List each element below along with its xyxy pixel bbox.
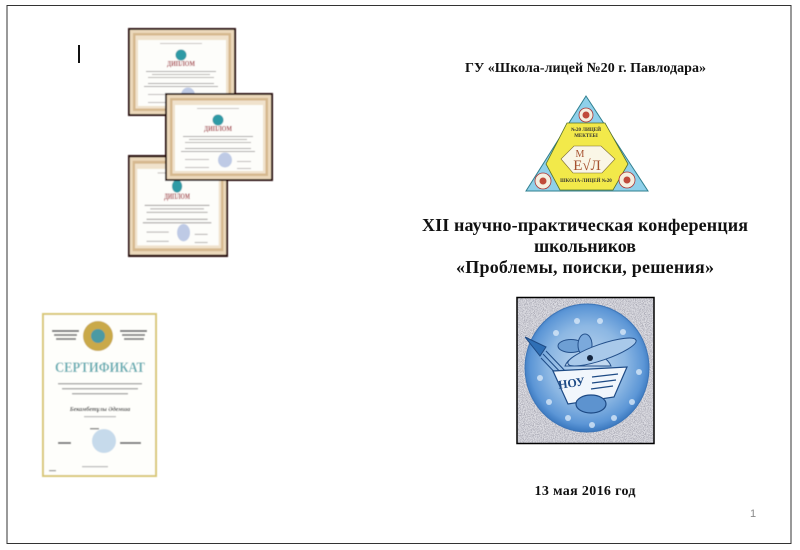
organisation heading: ГУ «Школа-лицей №20 г. Павлодара» <box>465 61 706 76</box>
school logo: МЕКТЕБІ <box>574 134 598 139</box>
certificate stamp <box>92 429 116 453</box>
open book: НОУ <box>557 374 586 392</box>
diploma: bottom <box>128 155 228 257</box>
school logo: №20 ЛИЦЕЙ <box>571 127 601 133</box>
diplomas group <box>128 28 273 257</box>
ink pot <box>576 395 606 413</box>
page number: 1 <box>750 508 756 520</box>
text cursor <box>78 45 80 63</box>
school logo: ШКОЛА-ЛИЦЕЙ №20 <box>560 178 612 184</box>
school logo: М <box>576 149 585 160</box>
school logo <box>526 96 648 191</box>
central hexagon <box>561 146 615 173</box>
conference badge <box>517 298 654 444</box>
conference title: «Проблемы, поиски, решения» <box>456 257 714 277</box>
conference date: 13 мая 2016 год <box>534 484 636 499</box>
conference title <box>422 215 748 277</box>
conference title: XII научно-практическая конференция <box>422 215 748 235</box>
diploma: top <box>128 28 236 116</box>
emblem <box>83 321 113 351</box>
hat <box>558 333 639 371</box>
conference title: школьников <box>534 236 636 256</box>
open book <box>553 367 627 404</box>
school logo: Е√Л <box>573 158 601 174</box>
ring of lights <box>537 318 642 428</box>
certificate <box>42 313 157 477</box>
diploma: middle <box>165 93 273 181</box>
certificate heading: СЕРТИФИКАТ <box>55 360 145 376</box>
certificate: Бекамбетұлы Әдемша <box>69 406 130 413</box>
rocket <box>525 337 568 383</box>
